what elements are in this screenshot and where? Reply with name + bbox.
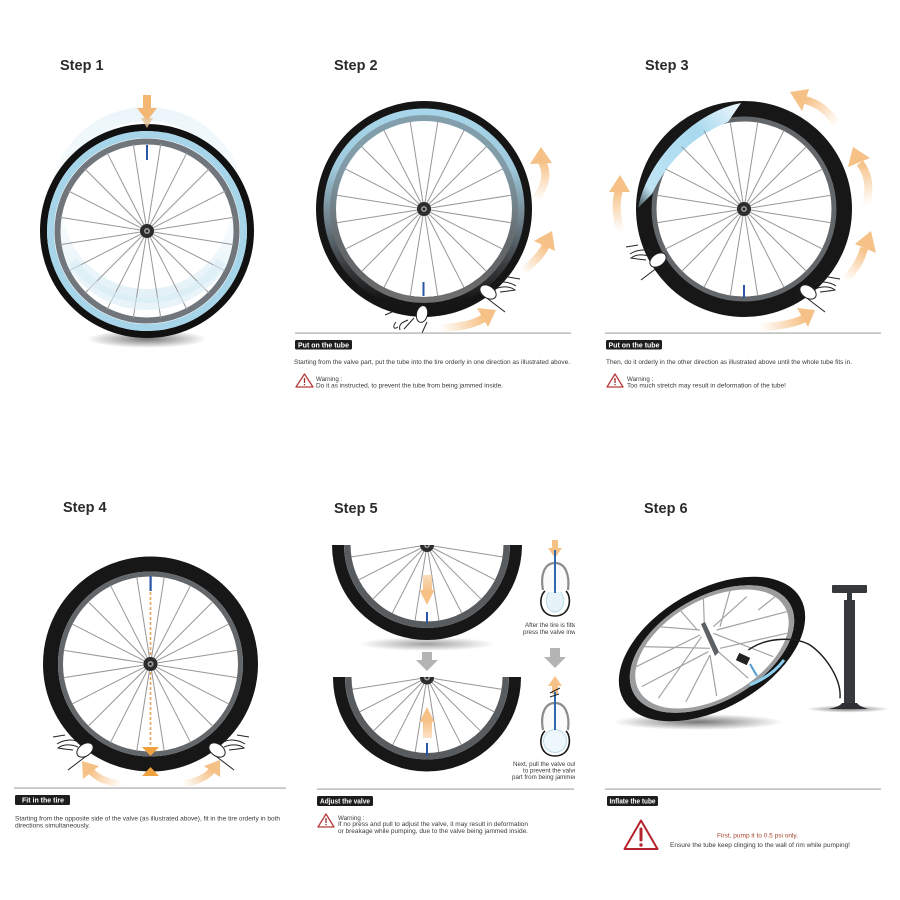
- warning text: Too much stretch may result in deformation of the tube!: [627, 382, 786, 390]
- label: put on the tube: [295, 340, 352, 350]
- rule: [295, 332, 571, 334]
- warning text: If no press and pull to adjust the valve, it may result in deformation: [338, 821, 529, 828]
- warning icon: [296, 374, 313, 387]
- caption: pull the valve: Next, pull the valve outward: [513, 761, 590, 768]
- arrow markers at bottom of tyre: [142, 747, 159, 776]
- wheel: [50, 564, 250, 764]
- warning text: Warning :: [627, 376, 654, 383]
- wheel shadow: [87, 330, 207, 348]
- arrows: both directions: [82, 760, 220, 784]
- heading: step 4: Step 4: [63, 500, 107, 516]
- tube glow: [750, 660, 784, 685]
- label: put on the tube: Put on the tube: [608, 342, 660, 349]
- wheel with tube partly fitted: [316, 101, 532, 317]
- hand: right: [477, 277, 520, 312]
- panel: step 6: [601, 501, 890, 849]
- wheel with tube: [44, 128, 250, 334]
- panel: step 2: [294, 58, 571, 390]
- warning icon: [624, 820, 658, 849]
- ghost tube being lowered: [56, 114, 238, 296]
- pump hose: [748, 639, 840, 698]
- warning text: or breakage while pumping, due to the valve being jammed inside.: [338, 828, 528, 835]
- caption: pull the valve: to prevent the valve: [523, 768, 578, 774]
- tube sliding in: [638, 103, 741, 208]
- red instruction: First, pump it to 0.5 psi only.: [717, 832, 798, 840]
- rule: [605, 788, 881, 790]
- tilted wheel: [601, 553, 823, 745]
- hand: right: [797, 277, 840, 312]
- panel: step 5: [317, 503, 575, 834]
- arrow: orange up from section: [548, 676, 562, 694]
- floor pump: [806, 585, 890, 712]
- lower half wheel: [333, 677, 521, 772]
- warning text: [627, 376, 786, 390]
- label: fit in the tire: Fit in the tire: [22, 798, 64, 805]
- panel: step 3: [605, 58, 881, 390]
- arrow: press valve: [420, 575, 434, 605]
- valve: [426, 612, 428, 623]
- caption: press the valve: [523, 622, 575, 636]
- label: adjust the valve: [317, 796, 373, 806]
- warning text: [316, 376, 503, 390]
- label: adjust the valve: Adjust the valve: [320, 798, 370, 806]
- label: inflate the tube: [607, 796, 658, 806]
- heading: step 3: Step 3: [645, 58, 689, 74]
- tire cross-section: pulled: [541, 688, 569, 756]
- rule: [605, 332, 881, 334]
- valve: [743, 285, 745, 298]
- rule: [14, 788, 286, 789]
- caption: press the valve: After the tire is fitted,: [525, 622, 582, 629]
- heading: step 2: Step 2: [334, 58, 378, 74]
- ghost tube band inside wheel: [72, 262, 222, 304]
- description: Starting from the opposite side of the valve (as illustrated above), fit in the tire orderly in both: [15, 816, 281, 822]
- description: Starting from the valve part, put the tube into the tire orderly in one direction as illustrated above.: [294, 359, 570, 366]
- tire cross-section: pressed: [541, 550, 569, 616]
- shadow under upper wheel: [359, 637, 495, 651]
- arrow: grey down right: [544, 648, 566, 668]
- valve: [146, 145, 148, 160]
- spokes and hub: [657, 122, 831, 296]
- label: fit in the tire: [15, 795, 70, 805]
- caption: pull the valve: [512, 762, 575, 780]
- warning text: [338, 815, 529, 835]
- warning text: Do it as instructed, to prevent the tube from being jammed inside.: [316, 382, 503, 390]
- instruction: Ensure the tube keep clinging to the wall of rim while pumping!: [670, 842, 850, 849]
- rule: [317, 788, 574, 790]
- arrow: orange down to section: [548, 540, 562, 558]
- upper half wheel: [332, 545, 522, 640]
- warning icon: [318, 814, 334, 827]
- heading: step 6: Step 6: [644, 501, 688, 517]
- valve connector: [736, 653, 757, 676]
- hub axle: [701, 622, 719, 656]
- heading: step 1: Step 1: [60, 58, 104, 74]
- hand: right: [206, 735, 249, 770]
- label: inflate the tube: Inflate the tube: [610, 798, 656, 806]
- arrow: down into rim: [137, 95, 157, 128]
- warning icon: [607, 374, 623, 387]
- panel: step 1: [44, 58, 250, 348]
- heading: step 5: Step 5: [334, 501, 378, 517]
- description: directions simultaneously.: [15, 822, 90, 830]
- hand: bottom: [385, 305, 429, 333]
- valve: [150, 576, 152, 591]
- wheel shadow: [613, 714, 783, 730]
- warning text: Warning :: [316, 376, 343, 383]
- description: Then, do it orderly in the other direction as illustrated above until the whole tube fits in.: [606, 359, 852, 366]
- warning text: Warning :: [338, 815, 365, 822]
- label: put on the tube: Put on the tube: [298, 342, 349, 349]
- caption: press the valve: press the valve inward: [523, 629, 585, 636]
- arrow: grey down: [416, 652, 438, 671]
- hand: left: [53, 735, 96, 770]
- panel: step 4: [14, 500, 286, 830]
- label: put on the tube: [606, 340, 662, 350]
- arrow: pull valve: [420, 707, 434, 738]
- valve: [426, 743, 428, 756]
- description: [15, 816, 281, 830]
- wheel rings: [644, 109, 844, 309]
- caption: pull the valve: part from being jammed: [512, 774, 578, 781]
- dashed centre line: [150, 592, 152, 747]
- spokes: [635, 591, 787, 702]
- arrows: one direction: [440, 147, 555, 328]
- hand: left: [626, 245, 669, 280]
- arrows: other direction: [609, 89, 876, 327]
- valve: [422, 282, 424, 296]
